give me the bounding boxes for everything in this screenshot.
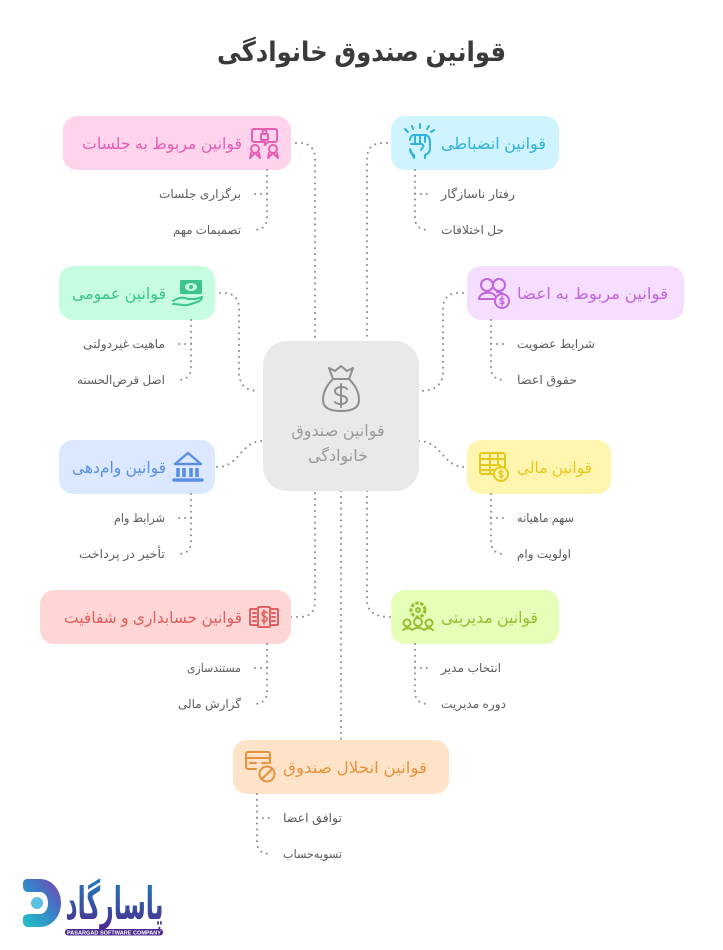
panel: financial rules (467, 440, 611, 562)
panel: member rules (467, 266, 684, 388)
connector (257, 794, 271, 854)
centre label (291, 423, 385, 466)
icon: bank (174, 453, 202, 480)
item: تصمیمات مهم (173, 223, 241, 237)
item: رفتار ناسازگار (440, 187, 515, 202)
connector (491, 320, 505, 380)
connector (177, 320, 191, 380)
title: قوانین صندوق خانوادگی (217, 36, 506, 68)
item: دوره مدیریت (441, 697, 506, 712)
icon: meetings (250, 129, 278, 158)
connector (177, 494, 191, 554)
panel: discipline rules (391, 116, 559, 237)
icon: table with coin (480, 453, 508, 481)
connector (253, 644, 267, 704)
item: سهم ماهیانه (517, 511, 574, 525)
icon: members with coin (479, 279, 509, 308)
item: مستندسازی (187, 661, 241, 676)
item: حل اختلافات (441, 223, 504, 237)
logo (23, 877, 164, 936)
heading: قوانین مدیریتی (441, 610, 538, 628)
heading: قوانین عمومی (72, 286, 166, 304)
icon: gear and team (403, 603, 433, 630)
item: ماهیت غیردولتی (83, 337, 165, 352)
heading: قوانین انضباطی (441, 136, 546, 154)
logo wordmark: پاسارگاد (66, 877, 164, 930)
icon: fist (405, 124, 434, 158)
item: برگزاری جلسات (159, 187, 241, 202)
item: گزارش مالی (178, 697, 241, 712)
item: تسویه‌حساب (283, 847, 342, 862)
icon: money bag (323, 366, 359, 411)
connector (253, 170, 267, 230)
heading: قوانین وام‌دهی (72, 460, 166, 478)
icon: blocked card (246, 752, 274, 782)
item: توافق اعضا (283, 811, 342, 826)
panel: dissolution rules (233, 740, 449, 862)
heading: قوانین انحلال صندوق (283, 760, 427, 778)
logo mark (23, 879, 61, 927)
item: حقوق اعضا (517, 373, 577, 388)
heading: قوانین حسابداری و شفافیت (64, 610, 242, 628)
item: اولویت وام (517, 547, 571, 562)
item: شرایط وام (114, 511, 165, 526)
item: تأخیر در پرداخت (79, 545, 165, 562)
panel: management rules (391, 590, 559, 712)
icon: ledger with dollar (250, 607, 278, 627)
item: اصل قرض‌الحسنه (77, 373, 165, 388)
connector (415, 644, 429, 704)
connector (491, 494, 505, 554)
connectors from centre to branches (217, 143, 465, 740)
panel: general rules (59, 266, 215, 388)
panel: meetings rules (63, 116, 291, 237)
item: شرایط عضویت (517, 337, 595, 352)
heading: قوانین مربوط به اعضا (517, 286, 668, 304)
centre label: قوانین صندوق (291, 423, 385, 441)
heading: قوانین مربوط به جلسات (82, 136, 242, 154)
connector (415, 170, 429, 230)
logo tagline: PASARGAD SOFTWARE COMPANY (67, 930, 161, 936)
panel: lending rules (59, 440, 215, 562)
centre panel (263, 341, 419, 491)
centre label: خانوادگی (308, 446, 368, 466)
item: انتخاب مدیر (440, 661, 501, 676)
icon: money on hand (173, 281, 202, 305)
heading: قوانین مالی (517, 460, 592, 478)
panel: accounting rules (40, 590, 291, 712)
